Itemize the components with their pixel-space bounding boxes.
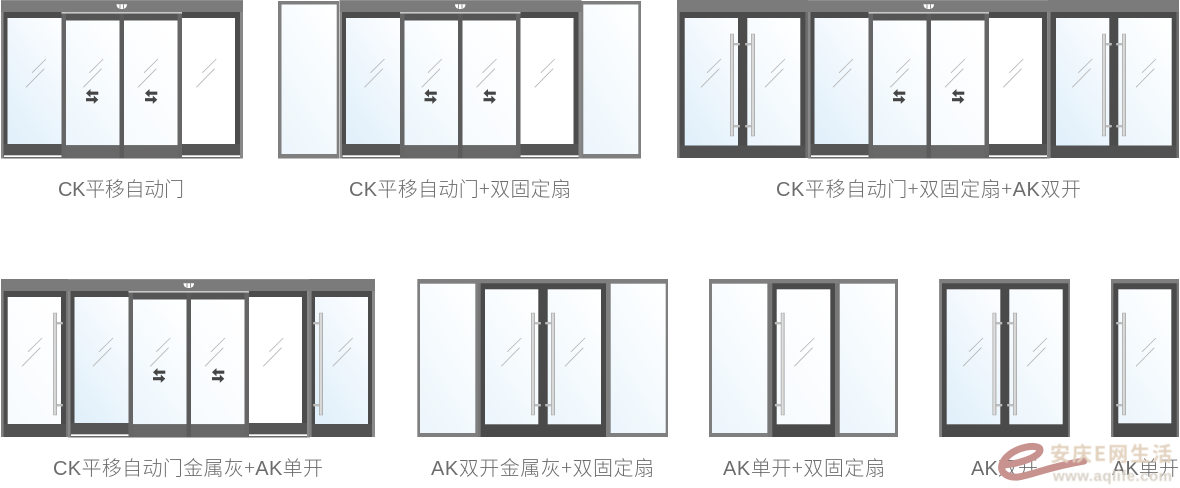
door 7: AK double door [939, 279, 1070, 437]
sliding unit [68, 279, 310, 438]
sliding unit [340, 0, 582, 158]
right fixed panel [836, 279, 898, 437]
watermark logo [1002, 438, 1172, 485]
label: CK with fixed panels and AK double: CK平移自动门+双固定扇+AK双开 [776, 173, 1081, 202]
watermark: site name: 安庆E网生活 [1050, 438, 1172, 467]
label: AK double metal grey with fixed panels: AK双开金属灰+双固定扇 [431, 452, 654, 481]
label: AK double: AK双开 [971, 458, 1038, 480]
left fixed panel [278, 1, 339, 158]
label: CK sliding door: CK平移自动门 [58, 178, 184, 201]
label: CK sliding door with two fixed panels: CK平移自动门+双固定扇 [349, 173, 571, 202]
right fixed panel [580, 1, 641, 158]
door 5: AK double metal grey with two fixed panels [417, 279, 668, 437]
label: AK single with fixed panels: AK单开+双固定扇 [723, 452, 885, 481]
door 1: CK sliding door [1, 0, 243, 158]
right fixed panel [606, 279, 668, 437]
watermark: url: www.aqlife.com [1052, 468, 1172, 485]
label: AK single: AK单开 [1112, 457, 1179, 480]
center single door [768, 279, 839, 437]
door 6: AK single with two fixed panels [709, 279, 898, 437]
center double door [478, 279, 610, 437]
label: CK metal grey with AK single: CK平移自动门金属灰+AK单开 [53, 452, 323, 481]
door 4: CK metal grey with AK single doors [1, 279, 375, 438]
sliding unit [808, 0, 1050, 158]
right AK double door [1048, 0, 1179, 158]
watermark: e mark [1002, 446, 1084, 477]
door 3: CK sliding door with two AK double doors [677, 0, 1179, 158]
right AK single door [309, 279, 375, 437]
left fixed panel [709, 279, 771, 437]
left AK single door [1, 279, 70, 437]
left fixed panel [417, 279, 479, 437]
door 8: AK single door [1111, 279, 1179, 437]
door 2: CK sliding door with two fixed panels [278, 0, 641, 158]
left AK double door [677, 0, 808, 158]
